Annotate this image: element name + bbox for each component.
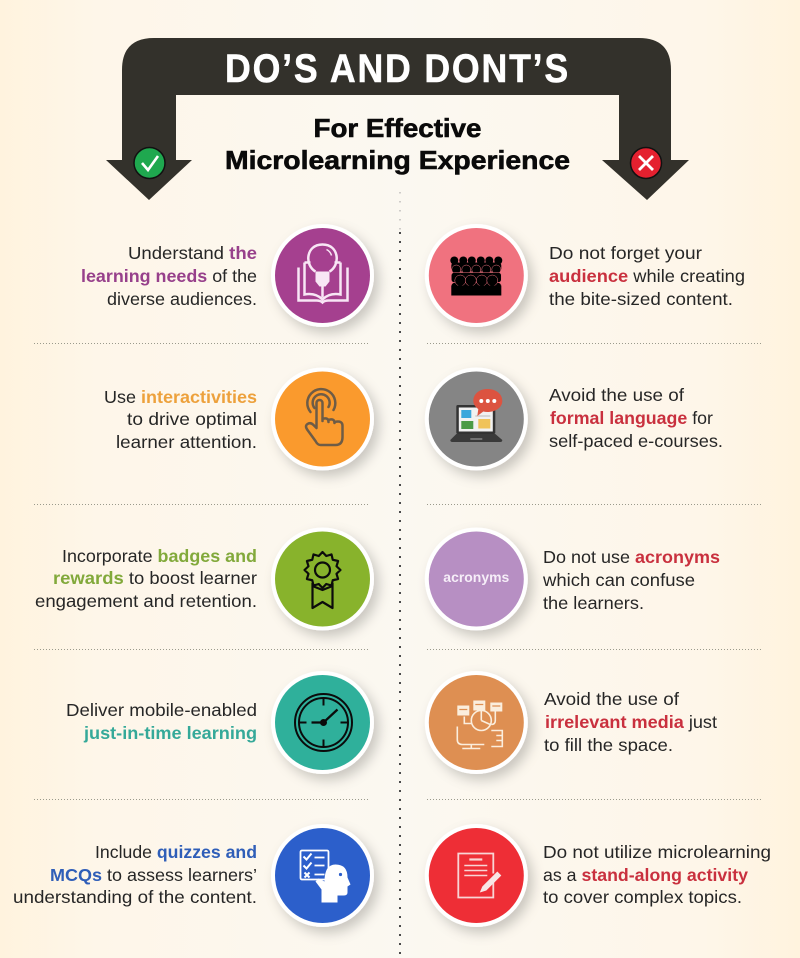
don't 2: formal language xyxy=(425,368,723,470)
text block: to fill the space. xyxy=(544,735,673,755)
title: DO’S AND DONT’S xyxy=(225,47,570,91)
text block xyxy=(35,546,257,611)
text block: as a stand-along activity xyxy=(543,865,748,885)
text block xyxy=(104,387,257,452)
header banner with two down arrows xyxy=(106,38,689,200)
icon: red cross xyxy=(630,148,662,178)
text block: understanding of the content. xyxy=(13,887,257,907)
text block: rewards to boost learner xyxy=(53,568,257,588)
text block: learning needs of the xyxy=(81,266,257,286)
icon: media charts on monitor xyxy=(425,671,528,774)
text block: self-paced e-courses. xyxy=(549,431,723,451)
text block: irrelevant media just xyxy=(545,712,717,732)
text block: audience while creating xyxy=(549,266,745,286)
text block: diverse audiences. xyxy=(107,289,257,309)
icon: head with checklist xyxy=(271,824,374,927)
icon: award ribbon xyxy=(271,528,374,630)
icon: clock xyxy=(271,671,374,774)
icon: green check xyxy=(134,148,165,178)
icon: acronyms disc xyxy=(425,528,528,630)
text block: the bite-sized content. xyxy=(549,289,733,309)
icon: tapping hand xyxy=(271,368,374,470)
text block: to cover complex topics. xyxy=(543,887,742,907)
icon: acronyms disc: acronyms xyxy=(443,569,510,585)
text block xyxy=(66,700,257,743)
do 5: quizzes and MCQs xyxy=(13,824,374,927)
text block xyxy=(543,842,771,907)
subtitle: For Effective xyxy=(314,113,482,143)
do 1: learning needs xyxy=(81,224,374,327)
subtitle xyxy=(225,113,570,175)
text block: Understand the xyxy=(128,243,257,263)
don't 3: acronyms xyxy=(425,528,720,630)
text block: engagement and retention. xyxy=(35,591,257,611)
do 2: interactivities xyxy=(104,368,374,470)
text block xyxy=(542,547,720,613)
text block: learner attention. xyxy=(116,432,257,452)
icon: laptop with speech bubble xyxy=(425,368,528,470)
text block: Use interactivities xyxy=(104,387,257,407)
text block: Avoid the use of xyxy=(544,689,679,709)
don't 1: audience xyxy=(425,224,745,327)
text block xyxy=(13,842,257,907)
text block: to drive optimal xyxy=(127,409,257,429)
icon: document and pencil xyxy=(425,824,528,927)
text block: just-in-time learning xyxy=(83,723,257,743)
text block: Deliver mobile-enabled xyxy=(66,700,257,720)
icon: audience xyxy=(425,224,528,327)
icon: bulb and book xyxy=(271,224,374,327)
arrow band xyxy=(106,38,689,200)
text block: Do not use acronyms xyxy=(543,547,720,567)
text block: the learners. xyxy=(543,593,644,613)
text block xyxy=(81,243,257,309)
text block: MCQs to assess learners’ xyxy=(50,865,257,885)
don't 5: stand-along activity xyxy=(425,824,771,927)
text block: Avoid the use of xyxy=(549,385,684,405)
text block: formal language for xyxy=(550,408,713,428)
do 3: badges and rewards xyxy=(35,528,374,630)
text block: Do not utilize microlearning xyxy=(543,842,771,862)
text block xyxy=(549,385,723,451)
text block: Do not forget your xyxy=(549,243,702,263)
don't 4: irrelevant media xyxy=(425,671,717,774)
text block: which can confuse xyxy=(542,570,695,590)
text block: Incorporate badges and xyxy=(62,546,257,566)
text block xyxy=(544,689,717,755)
text block: Include quizzes and xyxy=(95,842,257,862)
text block xyxy=(549,243,745,309)
subtitle: Microlearning Experience xyxy=(225,145,570,175)
do 4: just-in-time learning xyxy=(66,671,374,774)
